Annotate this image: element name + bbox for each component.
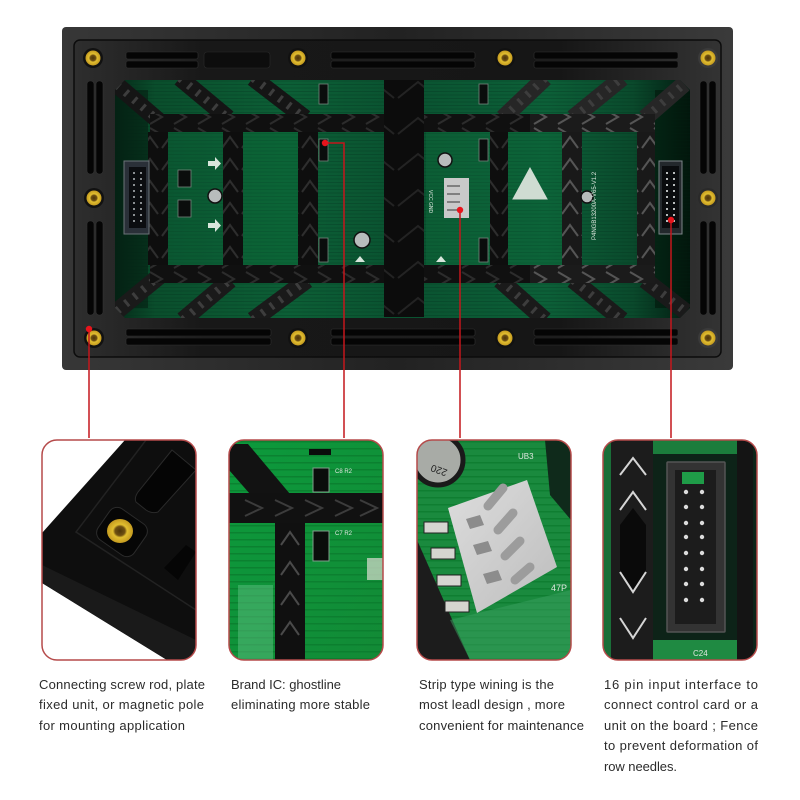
panel: 16 pin header close-up xyxy=(603,440,757,660)
caption: brand IC: Brand IC: ghostline xyxy=(231,677,341,692)
resistor label: 47P xyxy=(551,583,567,593)
silkscreen text: C8 R2 xyxy=(335,469,353,475)
mounting recess xyxy=(96,507,148,557)
callout leader: strip connector xyxy=(457,207,463,438)
caption: screw rod xyxy=(39,677,205,733)
component pad xyxy=(367,558,383,580)
brass screw inserts xyxy=(83,48,718,348)
bright green board strips xyxy=(650,440,740,454)
callout leader: brand IC xyxy=(322,140,344,438)
chips near left connector xyxy=(178,84,488,262)
board label: UB3 xyxy=(518,452,534,461)
callout leader: 16 pin interface xyxy=(668,217,674,438)
right ribbon connector xyxy=(659,161,682,234)
horizontal beams xyxy=(150,114,655,283)
white connector body xyxy=(448,480,557,613)
panel: screw insert close-up xyxy=(42,440,196,660)
caption: screw rod: Connecting screw rod, plate xyxy=(39,677,205,692)
module outer case xyxy=(62,27,733,370)
long ventilation slot xyxy=(135,450,196,513)
centre beam xyxy=(384,80,424,317)
silkscreen labels xyxy=(427,171,598,240)
board labels: C24 xyxy=(693,649,708,658)
hazard triangle marking xyxy=(513,168,547,199)
card border xyxy=(229,440,383,660)
connector windows xyxy=(466,515,502,584)
connector pins xyxy=(488,488,530,580)
embossed label plate xyxy=(204,52,270,68)
caption: 16 pin interface: unit on the board ; Fence xyxy=(604,718,758,733)
caption: screw rod: fixed unit, or magnetic pole xyxy=(39,697,204,712)
panel: brand IC close-up: C7 R2 xyxy=(335,531,353,537)
marking on header xyxy=(682,472,704,484)
power strip connector xyxy=(444,178,469,218)
corner of black case xyxy=(42,440,196,660)
solder pads xyxy=(424,522,469,612)
module inner frame xyxy=(74,40,721,357)
capacitor xyxy=(413,435,463,485)
second slot xyxy=(164,545,196,580)
dark stripe right xyxy=(737,440,753,660)
caption: strip wiring xyxy=(419,677,584,733)
card border xyxy=(42,440,196,660)
case ridge xyxy=(76,440,196,610)
vertical beams xyxy=(148,132,655,265)
lower board glare xyxy=(450,590,571,660)
caption: 16 pin interface: row needles. xyxy=(604,759,677,774)
dark board cut-outs xyxy=(417,540,470,660)
beam chevrons xyxy=(620,458,646,638)
green circuit board xyxy=(115,80,690,318)
caption: brand IC xyxy=(231,677,370,712)
card border xyxy=(417,440,571,660)
diagonal ribs xyxy=(117,78,686,320)
caption: brand IC: eliminating more stable xyxy=(231,697,370,712)
mounting frame slots xyxy=(87,52,716,345)
silkscreen labels: VCC GND xyxy=(427,190,433,213)
left ribbon connector xyxy=(124,161,149,234)
caption: strip wiring: most leadl design , more xyxy=(419,697,565,712)
driver IC chips xyxy=(313,468,329,492)
vertical rib xyxy=(275,523,305,660)
white arrow markings xyxy=(208,157,446,262)
horizontal rib xyxy=(229,493,383,523)
brass insert xyxy=(107,519,133,543)
photo: LED module rear view xyxy=(62,27,733,370)
panel: strip connector close-up xyxy=(413,435,571,660)
silkscreen labels: P4NGB13200A-V65-V1.2 xyxy=(592,171,598,240)
glare on board xyxy=(238,585,273,660)
case side edge xyxy=(42,565,196,660)
capacitor print: 220 xyxy=(429,461,449,478)
capacitors xyxy=(208,153,593,248)
callout leader: screw insert xyxy=(86,326,92,438)
caption: 16 pin interface: to prevent deformation of xyxy=(604,738,758,753)
caption: 16 pin interface: connect control card or a xyxy=(604,697,759,712)
caption: strip wiring: convenient for maintenance xyxy=(419,718,584,733)
panel: brand IC close-up xyxy=(229,440,383,660)
diagonal rib xyxy=(229,444,290,494)
card border xyxy=(603,440,757,660)
caption: screw rod: for mounting application xyxy=(39,718,185,733)
pin header shroud xyxy=(667,462,725,632)
caption: 16 pin interface xyxy=(604,677,759,774)
black beam xyxy=(611,440,653,660)
header pins xyxy=(684,490,704,602)
caption: 16 pin interface: 16 pin input interface to xyxy=(604,677,758,692)
caption: strip wiring: Strip type wining is the xyxy=(419,677,554,692)
